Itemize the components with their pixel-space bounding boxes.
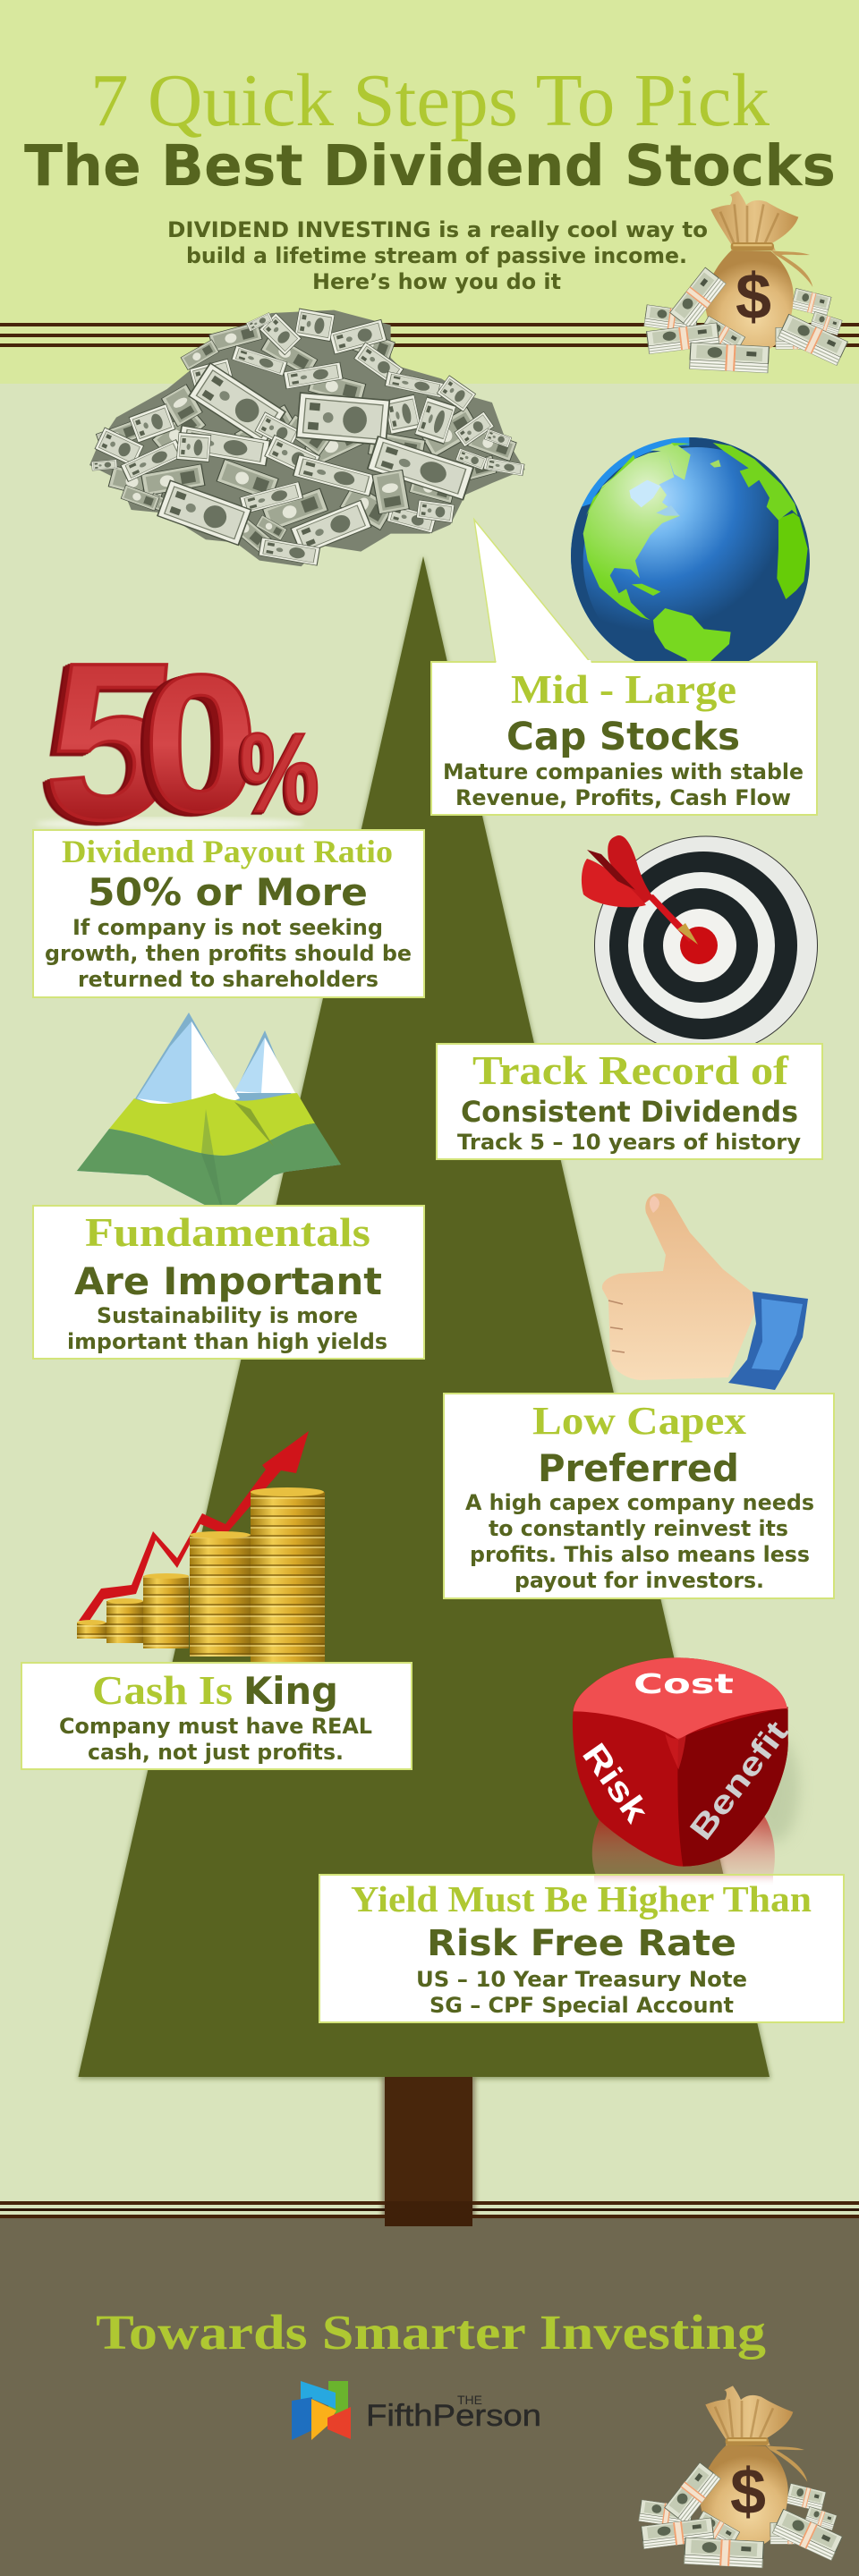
title line 2: The Best Dividend Stocks: [24, 133, 836, 199]
tree foliage: [79, 556, 770, 2077]
intro text: DIVIDEND INVESTING is a really cool way to: [167, 217, 708, 242]
panel: cash is king: cash, not just profits.: [88, 1740, 344, 1765]
panel: cash is king: [21, 1663, 412, 1769]
panel: dividend payout ratio: 50% or More: [88, 870, 368, 914]
panel: dividend payout ratio: If company is not seeking: [72, 915, 383, 940]
panel: fundamentals: [33, 1206, 424, 1359]
icon: 50 percent: 0: [143, 633, 259, 852]
logo: The Fifth Person: THE: [457, 2393, 482, 2407]
panel: low capex: to constantly reinvest its: [489, 1516, 788, 1541]
icon: money bag bottom: $: [730, 2456, 766, 2528]
trunk overlap over footer: [385, 2201, 472, 2226]
panel: track record: Track 5 – 10 years of history: [457, 1130, 801, 1155]
panel: dividend payout ratio: returned to shareholders: [78, 967, 378, 992]
icon: risk cost benefit dice: [573, 1657, 799, 1875]
panel: cash is king: Company must have REAL: [59, 1714, 372, 1739]
icon: 50 percent: 5: [37, 616, 186, 866]
panel: cash is king: King: [243, 1669, 338, 1713]
title line 1: 7 Quick Steps To Pick: [90, 59, 770, 142]
icon: money bag top: $: [736, 261, 771, 333]
panel: dividend payout ratio: Dividend Payout Ratio: [62, 834, 393, 869]
icon: risk cost benefit dice: Risk: [574, 1737, 656, 1830]
header band background: [0, 0, 859, 384]
footer heading: Towards Smarter Investing: [96, 2305, 766, 2360]
panel: low capex: A high capex company needs: [465, 1490, 814, 1515]
tree trunk: [382, 2077, 475, 2229]
footer band: [0, 2218, 859, 2576]
panel: low capex: Preferred: [538, 1446, 739, 1490]
intro text: Here’s how you do it: [312, 269, 561, 294]
panel: dividend payout ratio: growth, then profits should be: [45, 941, 412, 966]
icon: 50 percent: [36, 616, 319, 866]
icon: money bag bottom: [639, 2385, 842, 2568]
panel: low capex: profits. This also means less: [470, 1542, 810, 1567]
icon: mountains: [77, 1013, 341, 1215]
panel: yield vs risk free rate: Risk Free Rate: [427, 1923, 736, 1964]
panel: low capex: payout for investors.: [515, 1568, 764, 1593]
intro text: build a lifetime stream of passive income.: [186, 243, 687, 268]
top stripes: [0, 323, 859, 347]
panel: mid-large cap stocks: Mature companies with stable: [443, 759, 804, 784]
icon: risk cost benefit dice: Cost: [634, 1669, 734, 1700]
panel: mid-large cap stocks: [431, 660, 817, 815]
panel: cash is king: Cash Is: [92, 1667, 233, 1713]
callout pointer: [474, 520, 591, 664]
panel: track record: Track Record of: [472, 1047, 789, 1093]
icon: thumbs up: [602, 1193, 808, 1390]
panel: low capex: [444, 1394, 834, 1598]
panel: yield vs risk free rate: [319, 1875, 844, 2022]
panel: track record: [437, 1044, 822, 1159]
panel: mid-large cap stocks: Mid - Large: [511, 667, 736, 712]
icon: globe: [571, 437, 810, 674]
panel: fundamentals: important than high yields: [67, 1329, 387, 1354]
panel: mid-large cap stocks: Revenue, Profits, Cash Flow: [455, 785, 791, 810]
icon: 50 percent: %: [240, 710, 319, 835]
panel: low capex: Low Capex: [532, 1399, 746, 1443]
panel: dividend payout ratio: [33, 830, 424, 997]
tree shadow: [78, 556, 770, 2079]
logo: The Fifth Person: [292, 2381, 541, 2440]
main background: [0, 384, 859, 2218]
panel: yield vs risk free rate: US – 10 Year Treasury Note: [416, 1967, 747, 1992]
panel: fundamentals: Fundamentals: [85, 1210, 370, 1255]
icon: target with dart: [582, 835, 818, 1055]
bottom stripes: [0, 2201, 859, 2218]
icon: risk cost benefit dice: Benefit: [682, 1714, 795, 1847]
icon: money bag top: [644, 191, 847, 373]
panel: track record: Consistent Dividends: [461, 1095, 798, 1129]
panel: mid-large cap stocks: Cap Stocks: [506, 715, 740, 759]
intro text: [167, 217, 708, 294]
panel: fundamentals: Are Important: [74, 1259, 382, 1303]
logo: The Fifth Person: FifthPerson: [366, 2399, 541, 2433]
panel: yield vs risk free rate: SG – CPF Special Account: [430, 1993, 734, 2018]
image: money pile: [89, 309, 525, 566]
panel: fundamentals: Sustainability is more: [97, 1303, 358, 1328]
icon: growth arrow and coin stacks: [77, 1431, 325, 1668]
panel: yield vs risk free rate: Yield Must Be Higher Than: [351, 1878, 812, 1919]
